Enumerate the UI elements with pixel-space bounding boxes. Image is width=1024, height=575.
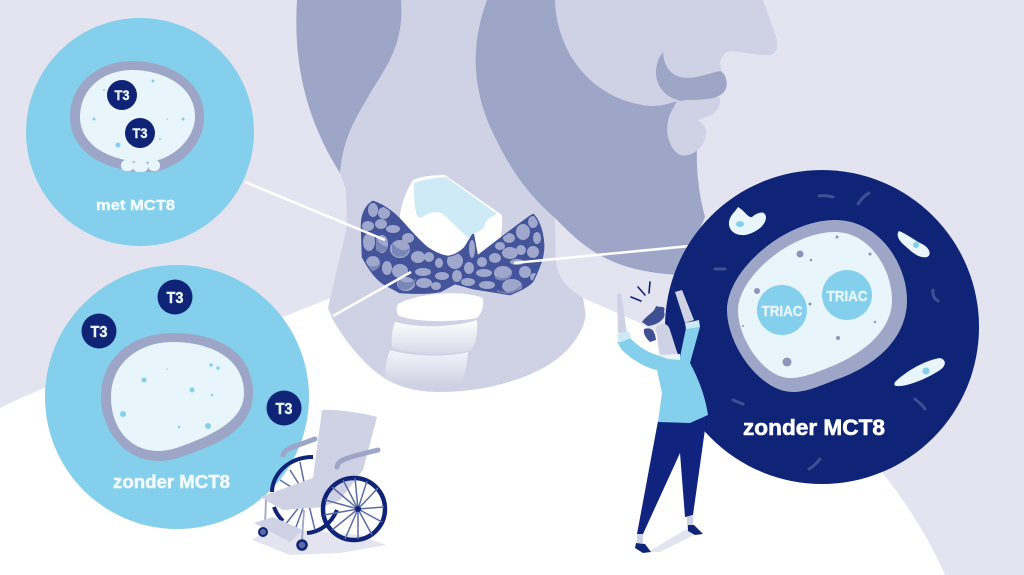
armrests <box>283 439 378 467</box>
socks <box>637 516 693 543</box>
pointer line: zonder MCT8 <box>333 272 411 316</box>
panel: zonder MCT8 with TRIAC: TRIAC <box>762 303 803 320</box>
back hair <box>296 0 401 173</box>
cell <box>101 333 253 461</box>
rear wheel <box>272 457 337 533</box>
white body <box>0 298 945 575</box>
sweater <box>617 327 708 423</box>
T3 molecule <box>82 314 116 348</box>
cartilage highlight <box>414 177 497 238</box>
upper lip <box>656 52 727 100</box>
illustration: head and neck <box>296 0 777 392</box>
T3 molecule <box>158 280 192 314</box>
tracheal rings <box>397 293 483 321</box>
panel: met MCT8 <box>26 18 254 246</box>
hair <box>642 306 665 342</box>
panel: zonder MCT8: T3 <box>166 290 184 307</box>
neck and head base <box>297 0 640 392</box>
chair back and seat <box>260 410 377 510</box>
left arm <box>617 293 627 333</box>
trousers <box>637 415 707 534</box>
frame <box>265 500 304 540</box>
figure: person with raised arms <box>617 282 708 553</box>
T3 molecule <box>125 118 155 148</box>
panel: zonder MCT8 <box>45 265 309 529</box>
exclamation marks <box>631 282 650 301</box>
panel: met MCT8: T3 <box>132 125 148 141</box>
floor shadow <box>252 528 386 555</box>
label: met MCT8 <box>96 197 175 214</box>
panel: zonder MCT8 with TRIAC <box>665 170 979 484</box>
lower lip and chin <box>667 97 720 155</box>
label: zonder MCT8 <box>113 472 230 492</box>
panel: met MCT8: T3 <box>114 87 130 103</box>
cell particles <box>92 80 184 148</box>
pointer line: TRIAC <box>514 246 690 263</box>
footrest <box>254 517 303 542</box>
T3 molecule <box>107 80 137 110</box>
cell particles <box>120 363 220 429</box>
label: zonder MCT8 <box>743 415 885 440</box>
pointer line: met MCT8 <box>245 182 385 240</box>
collar <box>657 354 680 360</box>
cuffs <box>617 320 700 343</box>
icon: wheelchair <box>252 410 386 555</box>
thyroid gland <box>362 202 543 294</box>
transporter MCT8 <box>121 160 160 172</box>
trachea <box>385 175 502 385</box>
cell shading <box>364 238 522 294</box>
cell <box>70 61 204 172</box>
face <box>555 0 777 106</box>
face and neck <box>656 324 679 356</box>
cell <box>727 220 907 392</box>
cell particles <box>742 236 876 366</box>
TRIAC molecule <box>822 270 872 320</box>
organelles <box>729 207 945 386</box>
panel: zonder MCT8: T3 <box>90 324 108 341</box>
T3 molecule <box>266 390 302 426</box>
jaw shadow <box>476 0 705 275</box>
casters <box>259 528 267 536</box>
panel: zonder MCT8: T3 <box>276 401 293 418</box>
front wheel <box>323 478 385 540</box>
TRIAC molecule <box>757 285 807 335</box>
fragments <box>715 193 938 469</box>
panel: zonder MCT8 with TRIAC: TRIAC <box>826 288 868 305</box>
feet shadow <box>648 528 698 552</box>
thyroid cartilage <box>400 175 502 275</box>
right arm <box>675 290 694 323</box>
shoes <box>635 543 651 553</box>
